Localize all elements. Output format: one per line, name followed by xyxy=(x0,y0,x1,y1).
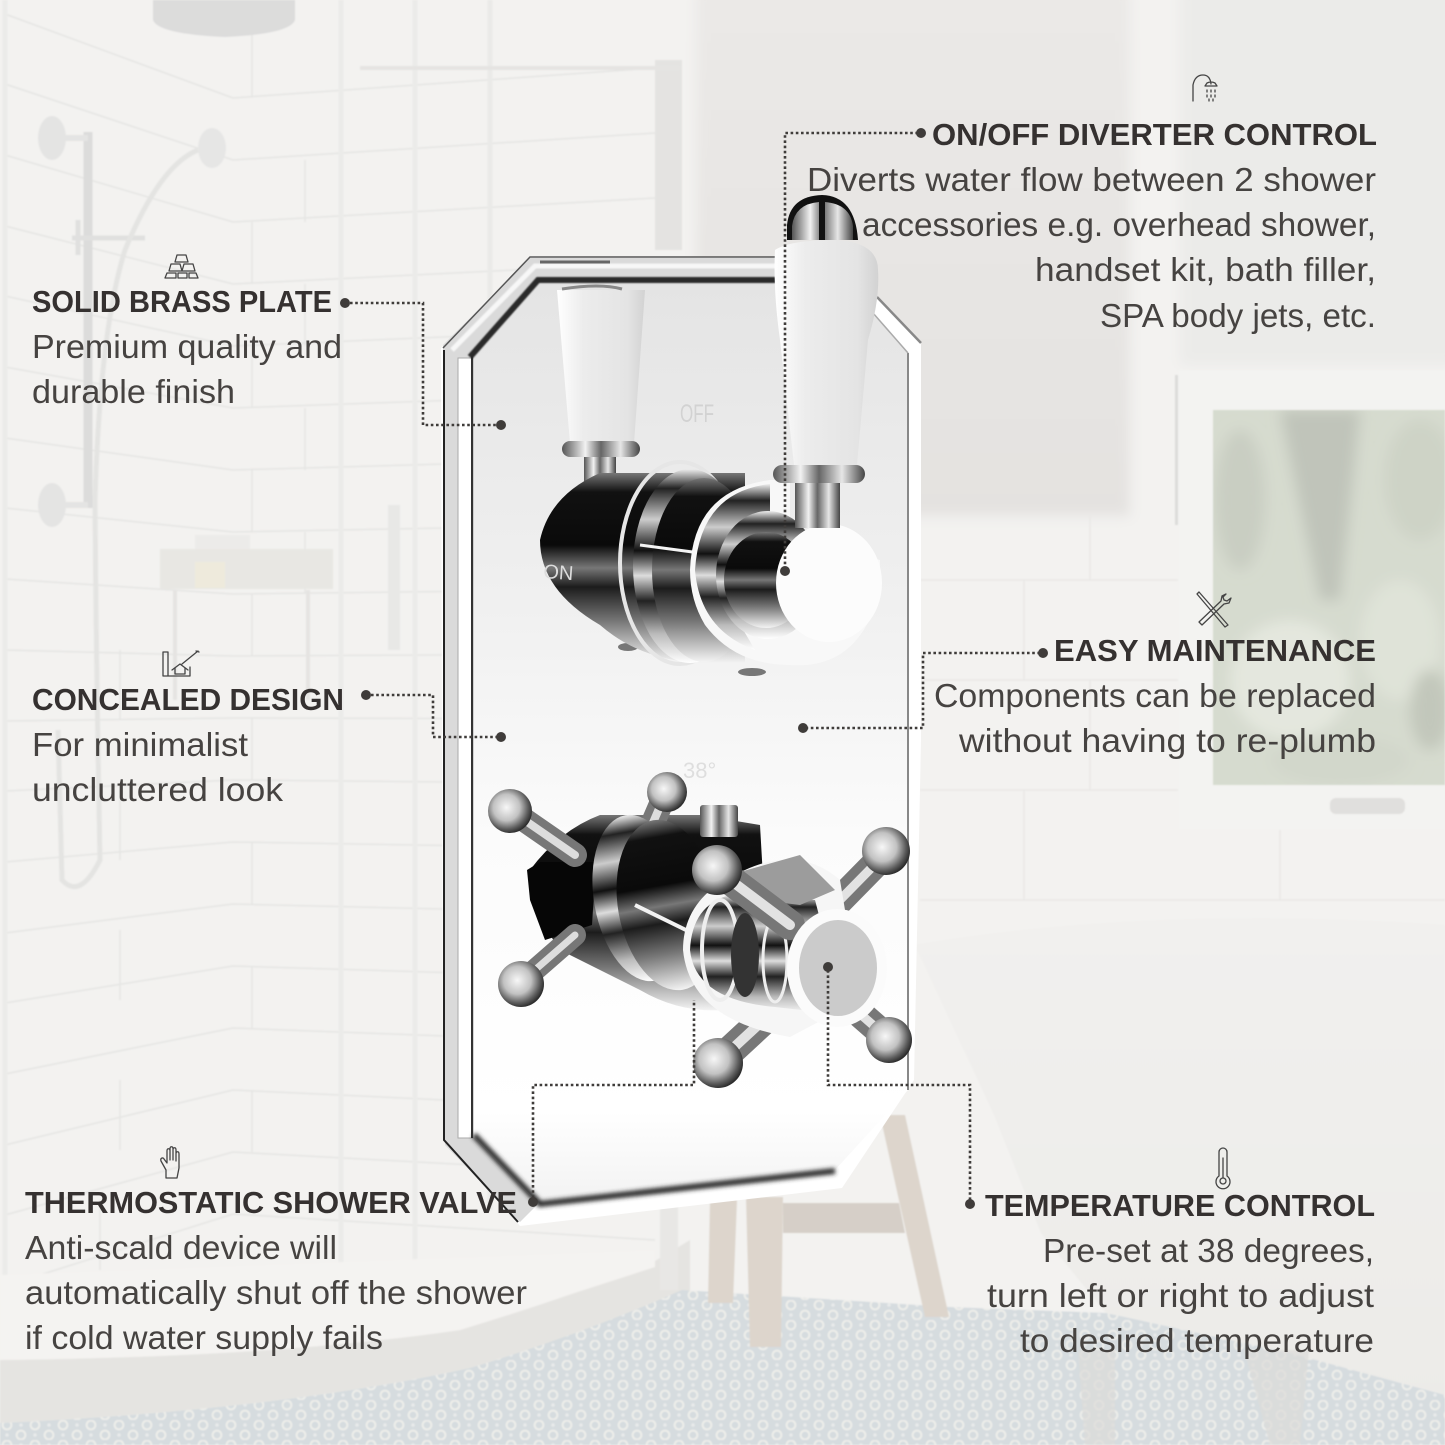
callout: solid brass plate xyxy=(32,255,506,430)
callout: solid brass plate: Premium quality and xyxy=(32,328,342,365)
front hub xyxy=(690,895,845,1015)
callout: easy maintenance xyxy=(798,592,1376,759)
shower rail and head xyxy=(38,0,295,887)
callout: concealed design: CONCEALED DESIGN xyxy=(32,682,344,717)
callout: temperature control: to desired temperature xyxy=(1020,1322,1374,1359)
leader xyxy=(780,128,926,576)
rear cross arms xyxy=(510,790,667,983)
callout: thermostatic shower valve: automatically shut off the shower xyxy=(25,1274,527,1311)
callout: concealed design: For minimalist xyxy=(32,726,248,763)
callout: temperature control: TEMPERATURE CONTROL xyxy=(985,1188,1375,1223)
lower temperature valve xyxy=(488,772,912,1088)
callout: temperature control xyxy=(823,962,1375,1359)
callout: solid brass plate: SOLID BRASS PLATE xyxy=(32,284,332,319)
callout: easy maintenance: without having to re-plumb xyxy=(958,722,1376,759)
callout: temperature control: Pre-set at 38 degrees, xyxy=(1043,1232,1374,1269)
glass door frame xyxy=(655,60,682,250)
callout: temperature control: turn left or right to adjust xyxy=(987,1277,1374,1314)
temperature stop pin xyxy=(700,805,738,837)
hub disc xyxy=(683,860,860,1037)
callout: thermostatic shower valve: THERMOSTATIC SHOWER VALVE xyxy=(25,1185,517,1220)
shower tray xyxy=(0,1240,690,1423)
tile wall right xyxy=(920,516,1445,900)
icon: shower xyxy=(1193,75,1217,101)
icon: house chart xyxy=(163,651,199,676)
callout: thermostatic shower valve: if cold water supply fails xyxy=(25,1319,383,1356)
tile wall left xyxy=(5,0,655,1286)
glass post xyxy=(660,1200,678,1290)
callout: on/off diverter control: handset kit, bath filler, xyxy=(1035,251,1376,288)
bath feet xyxy=(1078,1350,1309,1445)
valve plate xyxy=(441,256,921,1226)
callout: easy maintenance: Components can be replaced xyxy=(934,677,1376,714)
front rear arms behind hub xyxy=(717,852,890,1063)
leader xyxy=(340,298,506,430)
front lever handle xyxy=(773,195,878,528)
wooden stool xyxy=(708,1115,949,1347)
callout: concealed design: uncluttered look xyxy=(32,771,284,808)
window xyxy=(1178,370,1445,830)
callout: on/off diverter control: ON/OFF DIVERTER CONTROL xyxy=(932,117,1377,152)
icon: thermometer xyxy=(1216,1148,1230,1189)
label: OFF: OFF xyxy=(680,400,714,428)
leader xyxy=(798,648,1048,733)
floor xyxy=(0,1290,1445,1445)
callout: on/off diverter control xyxy=(780,75,1377,576)
rear body xyxy=(529,815,770,1010)
right wall gray panel xyxy=(696,0,1130,516)
callout: thermostatic shower valve xyxy=(25,1000,694,1356)
window handle xyxy=(1330,798,1405,814)
rear lever handle xyxy=(557,286,645,487)
callout: solid brass plate: durable finish xyxy=(32,373,235,410)
label: 38 degrees: 38° xyxy=(683,758,716,783)
bolts xyxy=(618,643,638,651)
callout: on/off diverter control: accessories e.g. overhead shower, xyxy=(862,206,1376,243)
callout: easy maintenance: EASY MAINTENANCE xyxy=(1054,633,1376,668)
shelf basket xyxy=(160,505,400,700)
front ring xyxy=(690,480,790,665)
bath tub xyxy=(915,918,1445,1395)
callout: on/off diverter control: SPA body jets, etc. xyxy=(1100,297,1376,334)
shower valve product xyxy=(441,195,921,1226)
leader xyxy=(528,1000,694,1207)
upper diverter valve xyxy=(540,195,882,676)
upper diverter valve: ON xyxy=(543,561,574,585)
leader xyxy=(361,690,506,742)
icon: hand xyxy=(161,1147,179,1178)
leader xyxy=(823,962,975,1209)
callout: on/off diverter control: Diverts water flow between 2 shower xyxy=(807,161,1376,198)
icon: gold bars xyxy=(165,255,198,278)
callout: thermostatic shower valve: Anti-scald device will xyxy=(25,1229,337,1266)
callout: concealed design xyxy=(32,651,506,808)
icon: tools xyxy=(1197,592,1231,627)
